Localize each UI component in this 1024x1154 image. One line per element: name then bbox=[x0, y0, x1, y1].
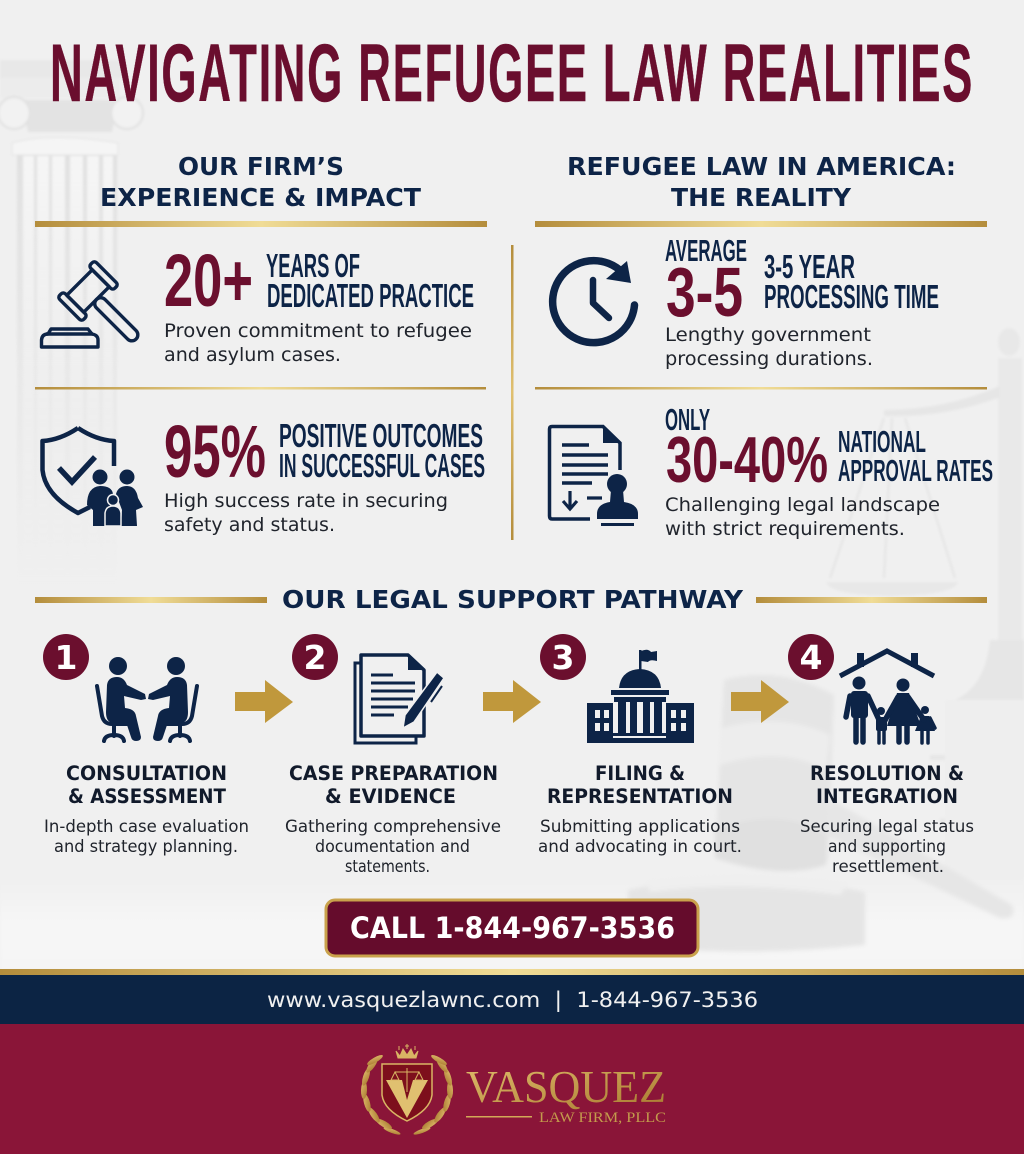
icon: two people meeting bbox=[97, 657, 197, 741]
label bbox=[279, 417, 485, 484]
background watermark: scales of justice bbox=[826, 328, 1024, 880]
description: with strict requirements. bbox=[665, 518, 905, 540]
heading: refugee law in america: THE REALITY bbox=[671, 183, 852, 212]
icon: government building with flag bbox=[587, 650, 694, 743]
step 4: resolution bbox=[788, 634, 974, 876]
icon: shield with family bbox=[42, 428, 143, 526]
big number: 3-5 bbox=[666, 253, 743, 331]
logo crest bbox=[360, 1044, 454, 1136]
number badge bbox=[292, 634, 338, 680]
step title: & ASSESSMENT bbox=[68, 785, 227, 808]
number badge: 3 bbox=[552, 638, 574, 677]
label bbox=[266, 247, 474, 314]
arrow bbox=[731, 680, 789, 723]
icon: document and stamp bbox=[550, 426, 638, 526]
description: processing durations. bbox=[665, 348, 873, 370]
heading: our firm's experience and impact: OUR FIRM’S bbox=[178, 152, 344, 181]
description bbox=[164, 320, 472, 366]
footer burgundy band bbox=[0, 1024, 1024, 1154]
call to action button: CALL 1-844-967-3536 bbox=[350, 911, 675, 945]
big number: 20+ bbox=[164, 239, 253, 322]
step description: and strategy planning. bbox=[54, 837, 238, 856]
label: NATIONAL bbox=[838, 424, 926, 459]
number badge: 2 bbox=[304, 638, 326, 677]
footer contact band: www.vasquezlawnc.com | 1-844-967-3536 bbox=[267, 988, 758, 1013]
step title bbox=[547, 762, 733, 808]
background watermark: gavel bbox=[628, 675, 1014, 952]
icon: family under a roof bbox=[840, 651, 935, 743]
heading: refugee law in america: REFUGEE LAW IN AMERICA: bbox=[567, 152, 956, 181]
step description bbox=[285, 817, 501, 876]
step description: and advocating in court. bbox=[538, 837, 742, 856]
background watermark: classical column bbox=[0, 60, 1024, 970]
step description: statements. bbox=[345, 857, 430, 876]
number badge bbox=[788, 634, 834, 680]
step title: CASE PREPARATION bbox=[289, 762, 498, 785]
description: High success rate in securing bbox=[164, 490, 448, 512]
scales bbox=[391, 1068, 423, 1092]
number badge bbox=[43, 634, 89, 680]
number badge: 1 bbox=[55, 638, 77, 677]
lead word: ONLY bbox=[665, 402, 710, 437]
description: Lengthy government bbox=[665, 324, 871, 346]
step description bbox=[538, 817, 742, 856]
call to action button bbox=[326, 900, 698, 956]
shield with V bbox=[382, 1064, 432, 1121]
step title: REPRESENTATION bbox=[547, 785, 733, 808]
lead word: AVERAGE bbox=[665, 233, 747, 268]
footer contact band bbox=[0, 975, 1024, 1024]
description bbox=[665, 494, 940, 540]
step title: CONSULTATION bbox=[66, 762, 227, 785]
panel: processing time stat bbox=[553, 233, 939, 370]
step 2: case preparation bbox=[285, 634, 501, 876]
panel: 95% stat bbox=[42, 410, 485, 536]
step description: resettlement. bbox=[832, 857, 944, 876]
description: safety and status. bbox=[164, 514, 335, 536]
big number: 30-40% bbox=[666, 423, 828, 496]
big number: 95% bbox=[164, 410, 266, 493]
icon: gavel bbox=[42, 261, 154, 357]
label: YEARS OF bbox=[266, 247, 360, 284]
step description: Submitting applications bbox=[540, 817, 740, 836]
icon: clock with arrow bbox=[553, 261, 634, 343]
description bbox=[164, 490, 448, 536]
step title bbox=[66, 762, 227, 808]
step title: RESOLUTION & bbox=[810, 762, 964, 785]
logo subline: LAW FIRM, PLLC bbox=[539, 1110, 666, 1126]
arrow bbox=[483, 680, 541, 723]
number badge: 4 bbox=[800, 638, 822, 677]
step description: Gathering comprehensive bbox=[285, 817, 501, 836]
description: and asylum cases. bbox=[164, 344, 341, 366]
step title: INTEGRATION bbox=[816, 785, 958, 808]
label: IN SUCCESSFUL CASES bbox=[279, 447, 485, 484]
step description: Securing legal status bbox=[800, 817, 974, 836]
step title: FILING & bbox=[595, 762, 685, 785]
description: Proven commitment to refugee bbox=[164, 320, 472, 342]
step description bbox=[44, 817, 249, 856]
panel: 20+ years stat bbox=[42, 239, 474, 366]
crown bbox=[396, 1044, 418, 1058]
description: Challenging legal landscape bbox=[665, 494, 940, 516]
arrow bbox=[235, 680, 293, 723]
description bbox=[665, 324, 873, 370]
label: 3-5 YEAR bbox=[764, 248, 855, 285]
laurel wreath bbox=[360, 1053, 454, 1136]
step title bbox=[810, 762, 964, 808]
label bbox=[764, 248, 939, 315]
step title: & EVIDENCE bbox=[325, 785, 456, 808]
label: POSITIVE OUTCOMES bbox=[279, 417, 483, 454]
number badge bbox=[540, 634, 586, 680]
label: DEDICATED PRACTICE bbox=[267, 277, 474, 314]
step description: documentation and bbox=[315, 837, 470, 856]
logo: Vasquez Law Firm bbox=[360, 1044, 666, 1136]
step description: and supporting bbox=[828, 837, 946, 856]
logo wordmark: VASQUEZ bbox=[466, 1062, 666, 1112]
step title bbox=[289, 762, 498, 808]
icon: documents and pen bbox=[355, 655, 444, 743]
heading: our legal support pathway: OUR LEGAL SUPPORT PATHWAY bbox=[282, 585, 744, 614]
step 3: filing bbox=[538, 634, 742, 856]
heading: refugee law in america bbox=[567, 152, 956, 212]
label bbox=[838, 424, 993, 488]
step 1: consultation bbox=[43, 634, 249, 856]
panel: approval rates stat bbox=[550, 402, 993, 540]
step description: In-depth case evaluation bbox=[44, 817, 249, 836]
step description bbox=[800, 817, 974, 876]
heading: our firm's experience and impact: EXPERIENCE & IMPACT bbox=[100, 183, 421, 212]
heading: our firm's experience and impact bbox=[100, 152, 421, 212]
